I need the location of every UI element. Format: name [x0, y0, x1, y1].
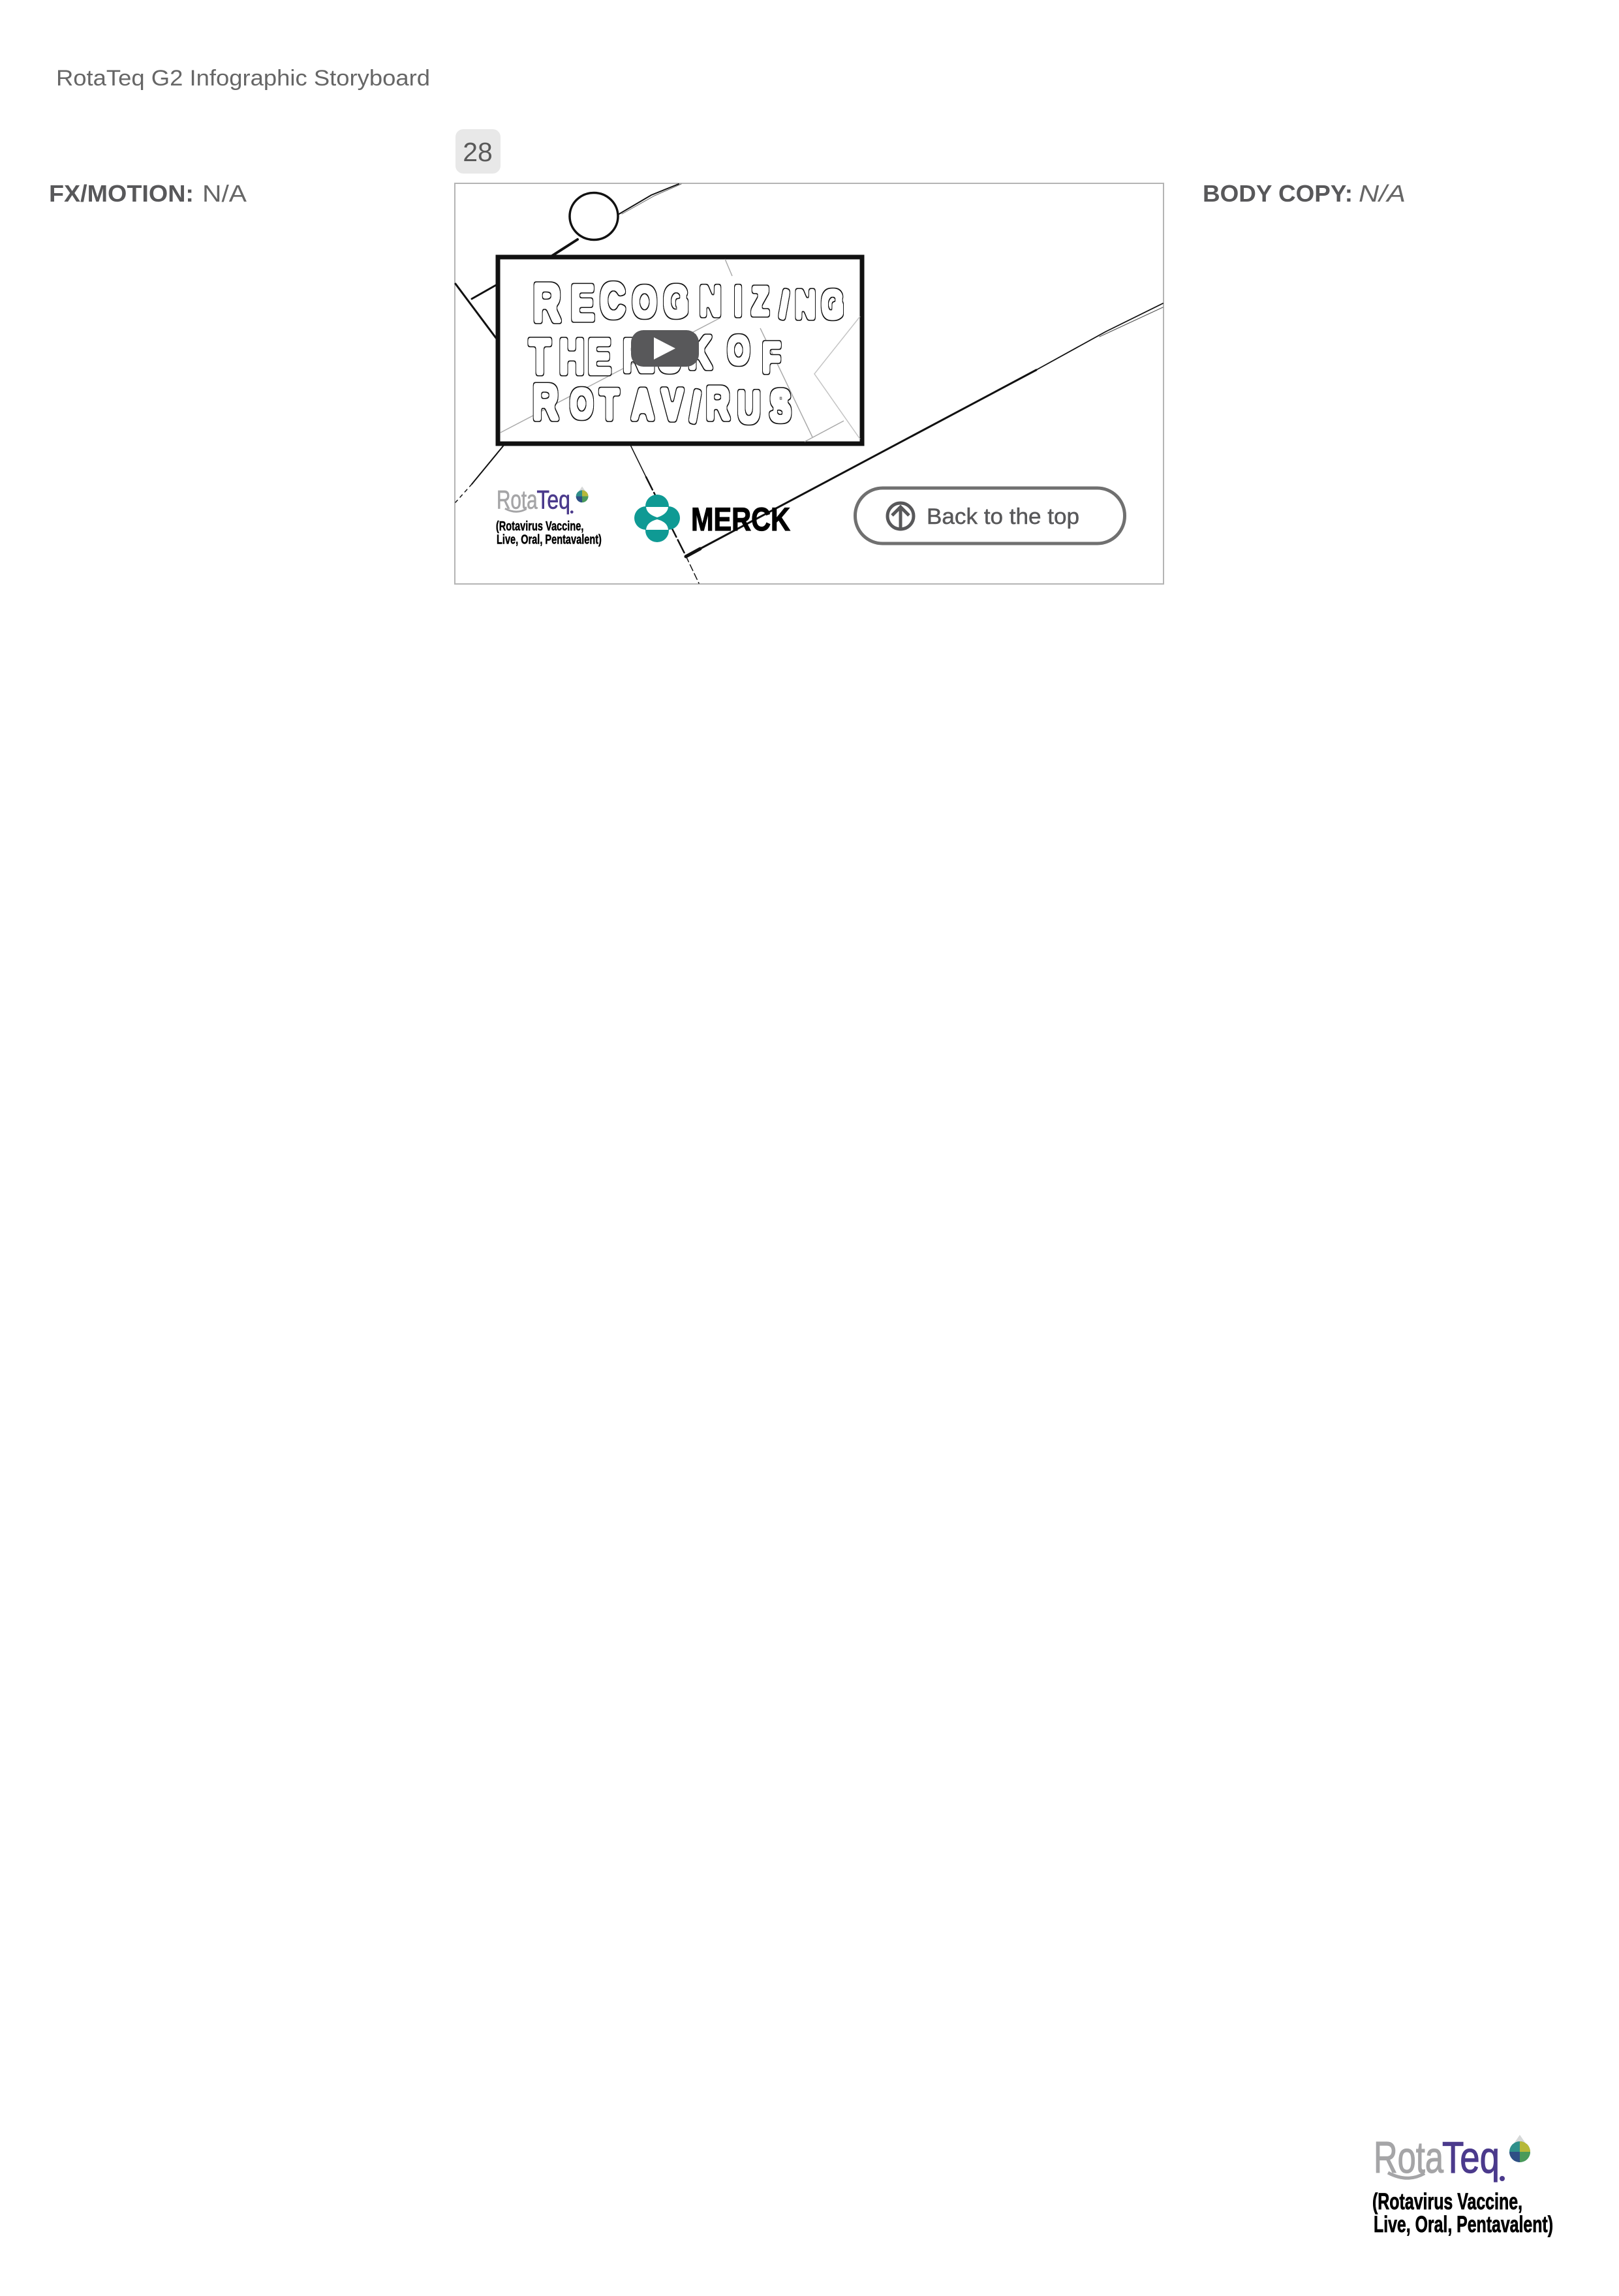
bubble lettering: Recognizing the risk of rotavirus: R: [705, 378, 730, 430]
footer RotaTeq logo: [1372, 2133, 1553, 2237]
back to the top button: [855, 488, 1125, 543]
bubble lettering: Recognizing the risk of rotavirus: O: [727, 328, 750, 373]
footer RotaTeq logo: Rota: [1374, 2133, 1443, 2182]
bubble lettering: Recognizing the risk of rotavirus: H: [559, 329, 585, 385]
bubble lettering: Recognizing the risk of rotavirus: E: [570, 275, 595, 331]
small RotaTeq logo: Live, Oral, Pentavalent): [497, 532, 602, 547]
bubble lettering: Recognizing the risk of rotavirus: O: [632, 277, 657, 327]
small RotaTeq logo: Teq: [536, 485, 570, 514]
frame number badge: 28: [463, 137, 493, 167]
bubble lettering: Recognizing the risk of rotavirus: V: [662, 379, 683, 430]
bubble lettering: Recognizing the risk of rotavirus: T: [529, 329, 551, 385]
icon: up arrow: [887, 503, 914, 529]
fx/motion note: N/A: [202, 180, 247, 207]
bubble lettering: Recognizing the risk of rotavirus: E: [587, 329, 611, 385]
body copy note: N/A: [1359, 180, 1406, 207]
bubble lettering: Recognizing the risk of rotavirus: C: [600, 273, 626, 329]
bubble lettering: Recognizing the risk of rotavirus: R: [532, 374, 559, 431]
bubble lettering: Recognizing the risk of rotavirus: A: [631, 379, 655, 429]
bubble lettering: Recognizing the risk of rotavirus: G: [663, 276, 689, 327]
bubble lettering: Recognizing the risk of rotavirus: R: [623, 330, 647, 382]
small RotaTeq logo: [496, 485, 602, 547]
back to the top button: Back to the top: [927, 504, 1079, 529]
small RotaTeq logo: Rota: [497, 485, 538, 514]
bubble lettering: Recognizing the risk of rotavirus: F: [762, 333, 781, 382]
footer RotaTeq logo: Teq: [1442, 2133, 1500, 2182]
icon: play button: [631, 330, 699, 367]
small RotaTeq logo: (Rotavirus Vaccine,: [496, 519, 583, 534]
footer RotaTeq logo: (Rotavirus Vaccine,: [1372, 2189, 1522, 2214]
bubble lettering: Recognizing the risk of rotavirus: R: [532, 272, 561, 333]
bubble lettering: Recognizing the risk of rotavirus: N: [699, 277, 722, 326]
bubble lettering: Recognizing the risk of rotavirus: I: [686, 380, 704, 433]
Merck logo: [634, 495, 790, 542]
bubble lettering: Recognizing the risk of rotavirus: O: [570, 381, 594, 428]
bubble lettering: Recognizing the risk of rotavirus: G: [821, 283, 844, 328]
Merck wordmark: MERCK: [691, 501, 790, 538]
bubble lettering: Recognizing the risk of rotavirus: K: [688, 327, 712, 379]
title card: [498, 257, 862, 444]
bubble lettering: Recognizing the risk of rotavirus: U: [737, 382, 761, 433]
bubble lettering: Recognizing the risk of rotavirus: N: [795, 283, 816, 328]
bubble lettering: Recognizing the risk of rotavirus: I: [734, 277, 743, 326]
bubble lettering: Recognizing the risk of rotavirus: S: [769, 380, 792, 431]
bubble lettering: Recognizing the risk of rotavirus: I: [646, 330, 655, 382]
title: RotaTeq G2 Infographic Storyboard: [56, 66, 430, 91]
icon: Merck symbol: [634, 495, 680, 542]
sketch lines behind title card: [455, 184, 1163, 583]
bubble lettering: Recognizing the risk of rotavirus: I: [776, 282, 792, 328]
body copy note: BODY COPY:: [1203, 180, 1353, 207]
frame number badge: [455, 129, 501, 174]
bubble lettering: Recognizing the risk of rotavirus: T: [600, 379, 619, 429]
bubble lettering: Recognizing the risk of rotavirus: Z: [751, 279, 769, 324]
bubble lettering: Recognizing the risk of rotavirus: S: [658, 330, 681, 382]
panel: video frame: [455, 183, 1164, 584]
faint background lines in title card: [501, 259, 860, 442]
footer RotaTeq logo: Live, Oral, Pentavalent): [1374, 2212, 1553, 2237]
bubble lettering: Recognizing the risk of rotavirus: [529, 272, 844, 433]
fx/motion note: FX/MOTION:: [49, 180, 194, 207]
